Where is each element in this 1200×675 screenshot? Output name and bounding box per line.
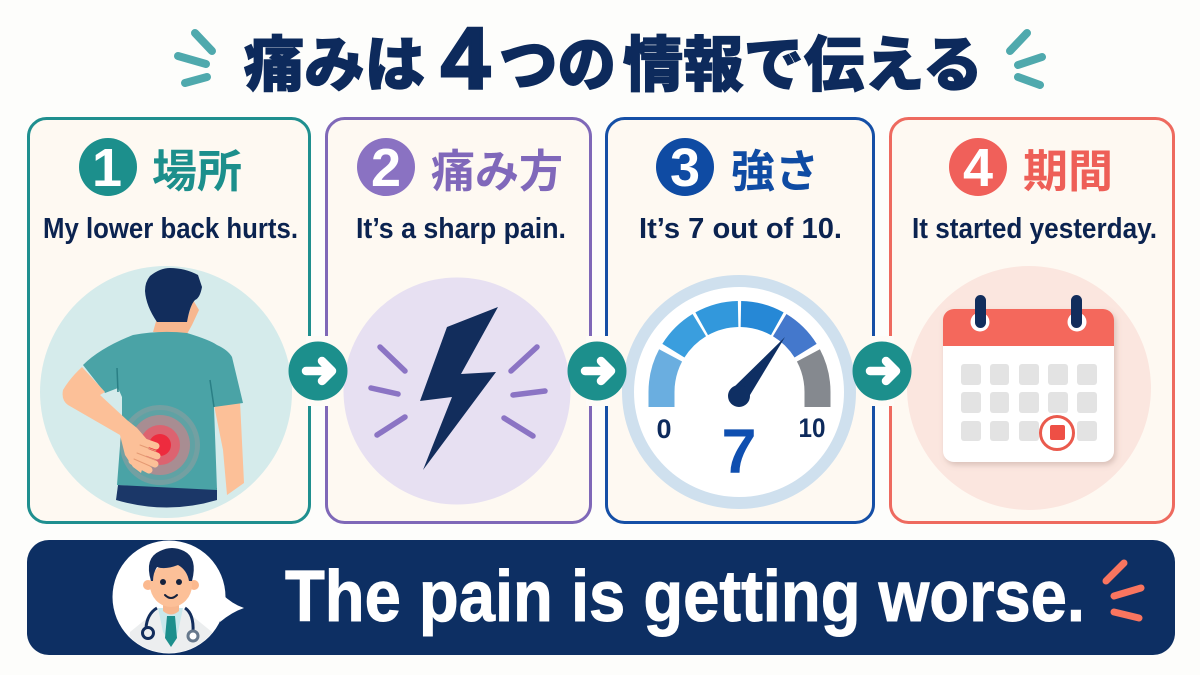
number badge 3: 3 <box>670 138 700 198</box>
number badge 1: 1 <box>92 138 122 198</box>
number badge 4: 4 <box>963 138 993 198</box>
doctor avatar speech bubble <box>112 540 244 660</box>
title text: 情報で伝える <box>623 32 983 99</box>
phrase: location: My lower back hurts. <box>43 213 298 245</box>
title sparks left <box>178 33 212 83</box>
number badge 1 <box>79 138 137 198</box>
banner text: The pain is getting worse. <box>285 557 1085 637</box>
emphasis sparks <box>1106 563 1141 618</box>
number badge 4 <box>949 138 1007 198</box>
panel: pain quality <box>326 118 590 522</box>
heading: duration: 期間 <box>1023 146 1113 197</box>
heading: intensity: 強さ <box>731 146 819 197</box>
highlighted date <box>1040 416 1074 450</box>
title text <box>244 10 983 107</box>
title text: 痛みは <box>244 32 425 99</box>
panel: intensity <box>606 118 874 522</box>
pain rings <box>120 405 200 485</box>
phrase: duration: It started yesterday. <box>912 213 1157 245</box>
heading: location: 場所 <box>152 146 242 197</box>
needle <box>728 337 785 407</box>
arm and hand <box>63 367 157 473</box>
phrase: intensity: It’s 7 out of 10. <box>639 213 842 245</box>
number badge 2 <box>357 138 415 198</box>
title sparks right <box>1010 33 1042 85</box>
panel: duration <box>890 118 1174 522</box>
illustration: lightning bolt <box>344 278 570 504</box>
gauge: 10 <box>798 413 826 443</box>
gauge <box>628 281 850 503</box>
gauge: 7 <box>721 417 757 487</box>
banner <box>27 540 1175 660</box>
illustration: man holding lower back <box>40 266 292 518</box>
number badge 3 <box>656 138 714 198</box>
heading: pain quality: 痛み方 <box>431 146 563 197</box>
panel: location <box>28 118 310 522</box>
title <box>178 10 1042 107</box>
phrase: pain quality: It’s a sharp pain. <box>356 213 566 245</box>
number badge 2: 2 <box>371 138 401 198</box>
arrow 1 <box>288 336 348 406</box>
gauge labels: 0 <box>656 414 672 444</box>
title text: 4 <box>441 10 490 107</box>
title text: つの <box>499 32 616 99</box>
calendar illustration <box>907 266 1151 510</box>
arrow 2 <box>568 336 626 406</box>
arrow 3 <box>852 336 912 406</box>
